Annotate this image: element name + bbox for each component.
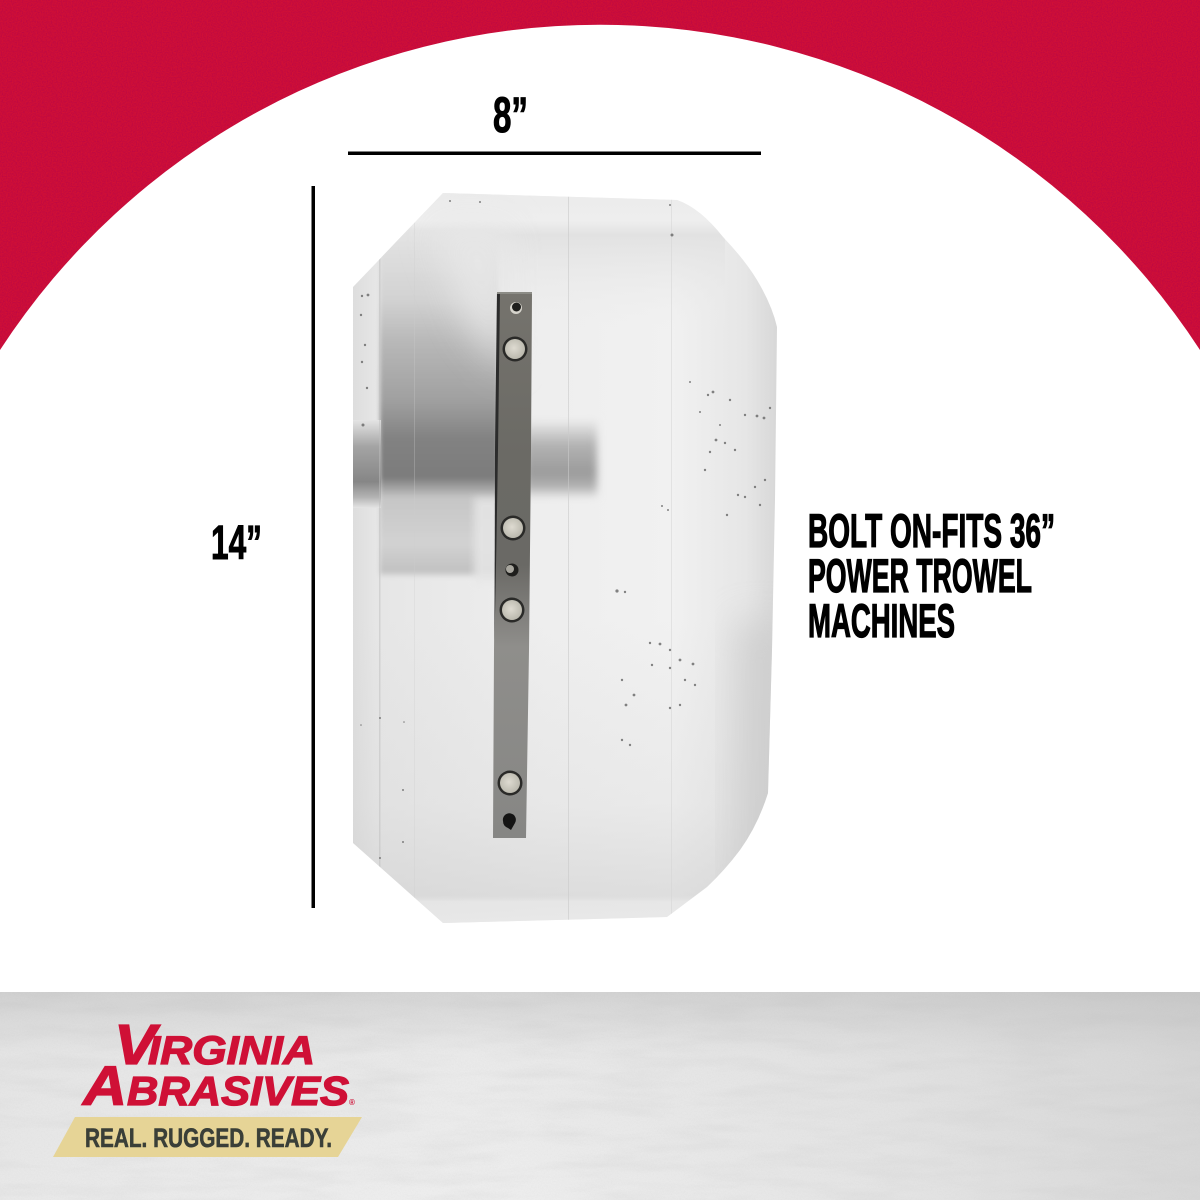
bottom shading <box>368 811 734 918</box>
vertical mill lines <box>379 258 380 868</box>
wordmark <box>81 1013 355 1117</box>
speckles <box>360 200 771 859</box>
wordmark: A <box>81 1054 127 1117</box>
width label: 8” <box>493 87 528 143</box>
hole top <box>510 302 522 314</box>
trowel blade plate <box>350 190 785 926</box>
width dimension: 8 inch <box>348 87 761 155</box>
height label: 14” <box>211 517 262 570</box>
hole bottom <box>503 813 516 830</box>
height line <box>312 186 315 908</box>
callout: fit description: MACHINES <box>808 594 955 647</box>
tagline banner <box>53 1117 362 1157</box>
bolt 2 <box>500 516 526 540</box>
height dimension: 14 inch <box>211 186 315 908</box>
bolt 3 <box>500 598 524 622</box>
plate metal surface <box>350 190 785 926</box>
hole middle <box>506 564 518 576</box>
red textured background <box>0 0 1200 360</box>
callout: fit description <box>808 504 1055 647</box>
left edge band <box>353 420 381 508</box>
top shading band <box>512 227 724 262</box>
wordmark: IRGINIA <box>148 1029 315 1073</box>
logo: Virginia Abrasives <box>53 1013 362 1157</box>
highlight above bar <box>453 254 497 368</box>
concrete floor band <box>0 992 1200 1200</box>
width line <box>348 152 761 155</box>
tagline banner: REAL. RUGGED. READY. <box>85 1123 332 1153</box>
bolt 1 <box>502 336 528 362</box>
mounting bar <box>493 292 532 838</box>
wordmark: V <box>114 1013 160 1077</box>
right edge shading <box>730 622 772 856</box>
callout: fit description: POWER TROWEL <box>808 549 1032 602</box>
light gap near bar below band <box>472 496 495 576</box>
bolt 4 <box>498 770 522 796</box>
left main shadow <box>380 230 498 578</box>
wordmark: BRASIVES <box>127 1068 349 1114</box>
wordmark: ® <box>349 1098 355 1107</box>
right of bar band <box>525 420 597 498</box>
